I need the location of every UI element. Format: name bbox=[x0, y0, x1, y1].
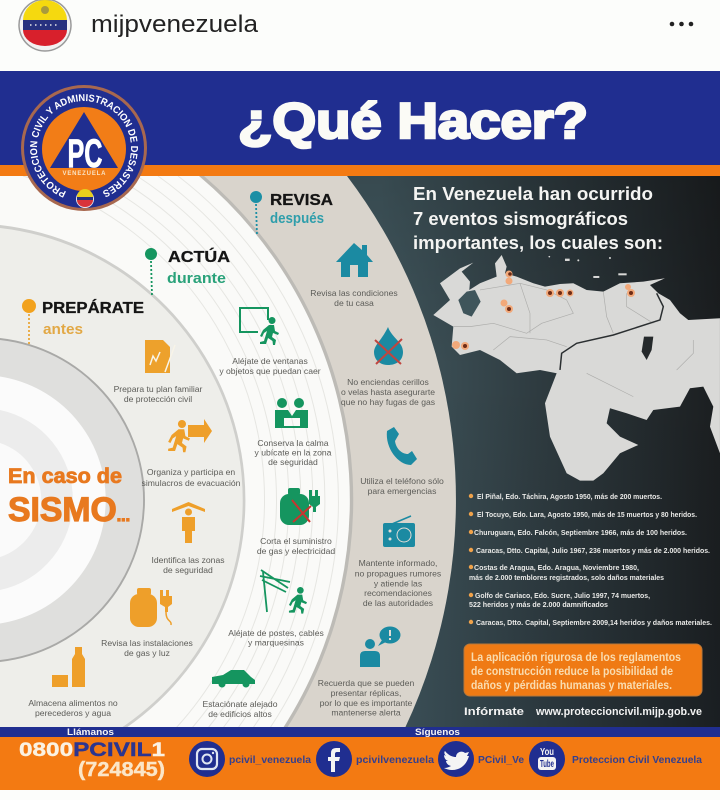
callout: building regulations bbox=[464, 644, 702, 696]
heading: actúa durante: ACTÚA bbox=[168, 247, 230, 266]
text: almacena alimentos: perecederos y agua bbox=[35, 708, 111, 718]
heading: prepárate antes: PREPÁRATE bbox=[42, 298, 144, 317]
guri lake bbox=[642, 337, 653, 360]
account name: mijpvenezuela bbox=[91, 11, 259, 38]
text: prepara plan: Prepara tu plan familiar bbox=[114, 384, 203, 394]
callout: building regulations: La aplicación rigurosa de los reglamentos bbox=[471, 652, 681, 664]
list: seismic events: 522 heridos y más de 2.000 damnificados bbox=[469, 600, 608, 609]
list: seismic events bbox=[469, 492, 712, 627]
icon: protección civil logo: VENEZUELA bbox=[62, 171, 106, 177]
text: instalaciones: Revisa las instalaciones bbox=[101, 638, 193, 648]
icon: facebook bbox=[316, 741, 352, 777]
islands bbox=[548, 256, 627, 278]
text: recuerda réplicas: Recuerda que se pueden bbox=[318, 678, 414, 688]
text: aléjate ventanas: Aléjate de ventanas bbox=[232, 356, 308, 366]
icon: youtube: You bbox=[540, 747, 554, 758]
center heading: en caso de sismo: En caso de bbox=[8, 465, 122, 488]
list: seismic events: El Tocuyo, Edo. Lara, Agosto 1950, más de 15 muertos y 80 heridos. bbox=[477, 510, 697, 519]
list: seismic events: Costas de Aragua, Edo. Aragua, Noviembre 1980, bbox=[474, 563, 639, 572]
icon: window and runner bbox=[239, 307, 279, 345]
text: no enciendas: o velas hasta asegurarte bbox=[341, 387, 435, 397]
text: conserva calma: y ubícate en la zona bbox=[255, 448, 332, 458]
text: postes cables: Aléjate de postes, cables bbox=[228, 628, 324, 638]
icon: pole and runner bbox=[260, 570, 307, 614]
text: mantente informado: Mantente informado, bbox=[359, 558, 437, 568]
panel: main body background bbox=[0, 176, 720, 728]
icon: gas tank and plug bbox=[130, 588, 172, 627]
text: mantente informado: de las autoridades bbox=[363, 598, 433, 608]
map heading: En Venezuela han ocurrido bbox=[413, 184, 653, 204]
list: seismic events: Churuguara, Edo. Falcón, Septiembre 1966, más de 100 heridos. bbox=[474, 528, 687, 537]
center heading: en caso de sismo bbox=[8, 465, 130, 529]
callout: building regulations: daños y pérdidas humanas y materiales. bbox=[471, 680, 672, 692]
icon: house bbox=[336, 243, 373, 277]
icon: twitter bbox=[438, 741, 474, 777]
icon: evacuation runner bbox=[168, 419, 212, 452]
icon: plan document bbox=[145, 340, 175, 373]
facebook handle: pcivilvenezuela bbox=[356, 754, 434, 766]
icon: profile avatar flag bbox=[19, 0, 71, 51]
map heading: importantes, los cuales son: bbox=[413, 233, 663, 253]
heading: actúa durante bbox=[145, 247, 230, 296]
heading: prepárate antes: antes bbox=[43, 321, 83, 338]
text: recuerda réplicas: presentar réplicas, bbox=[331, 688, 401, 698]
footer labels: Síguenos bbox=[415, 727, 460, 737]
text: mantente informado: recomendaciones bbox=[364, 588, 432, 598]
phone number bbox=[19, 740, 166, 781]
text: revisa condiciones: Revisa las condiciones bbox=[310, 288, 398, 298]
icon: instagram bbox=[189, 741, 225, 777]
header band bbox=[0, 71, 720, 176]
heading: prepárate antes bbox=[22, 298, 144, 346]
title: ¿Qué Hacer? bbox=[238, 93, 588, 149]
text: prepara plan: de protección civil bbox=[124, 394, 192, 404]
icon: youtube bbox=[529, 741, 565, 777]
map earthquake markers bbox=[452, 270, 635, 350]
text: conserva calma: de seguridad bbox=[268, 457, 318, 467]
text: estaciónate: de edificios altos bbox=[208, 709, 272, 719]
list: seismic events: Caracas, Dtto. Capital, Julio 1967, 236 muertos y más de 2.000 heridos. bbox=[476, 546, 710, 555]
icon: food and water bbox=[52, 647, 85, 687]
icon: gas cut bbox=[280, 488, 320, 525]
footer labels bbox=[67, 727, 460, 737]
icon: more menu bbox=[670, 22, 693, 26]
youtube channel: Proteccion Civil Venezuela bbox=[572, 754, 702, 766]
text: estaciónate: Estaciónate alejado bbox=[202, 699, 278, 709]
list: seismic events: Golfo de Cariaco, Edo. Sucre, Julio 1997, 74 muertos, bbox=[475, 591, 650, 600]
text: instalaciones: de gas y luz bbox=[124, 648, 170, 658]
text: simulacros: Organiza y participa en bbox=[147, 467, 235, 477]
list: seismic events: más de 2.000 temblores registrados, solo daños materiales bbox=[469, 573, 664, 582]
text: aléjate ventanas: y objetos que puedan caer bbox=[219, 366, 321, 376]
icon: radio bbox=[383, 516, 415, 547]
icon: car bbox=[212, 670, 255, 688]
panel: concentric arcs bbox=[0, 176, 456, 728]
text: revisa condiciones: de tu casa bbox=[334, 298, 374, 308]
footer bbox=[0, 727, 720, 790]
text: recuerda réplicas: mantenerse alerta bbox=[331, 708, 401, 718]
lake maracaibo bbox=[458, 290, 481, 317]
heading: revisa después: después bbox=[270, 210, 324, 227]
text: zonas de seguridad: de seguridad bbox=[163, 565, 213, 575]
center heading: en caso de sismo: SISMO... bbox=[8, 491, 130, 529]
map of venezuela bbox=[433, 255, 720, 481]
website line: Infórmate bbox=[464, 706, 524, 718]
icon: youtube: Tube bbox=[540, 759, 554, 770]
list: seismic events: El Piñal, Edo. Táchira, Agosto 1950, más de 200 muertos. bbox=[477, 492, 662, 501]
website line bbox=[464, 706, 702, 718]
icon: person with alert bubble bbox=[360, 626, 400, 667]
profile header bbox=[19, 0, 693, 51]
icon: phone bbox=[387, 427, 417, 465]
footer labels: Llámanos bbox=[67, 727, 114, 737]
instagram handle: pcivil_venezuela bbox=[229, 754, 311, 766]
text: recuerda réplicas: por lo que es importante bbox=[320, 698, 413, 708]
text: simulacros: simulacros de evacuación bbox=[142, 478, 241, 488]
column: actúa items bbox=[202, 307, 335, 719]
website line: www.proteccioncivil.mijp.gob.ve bbox=[535, 706, 702, 718]
heading: revisa después: REVISA bbox=[270, 192, 333, 209]
map heading: 7 eventos sismográficos bbox=[413, 209, 628, 229]
orinoco river bbox=[560, 293, 663, 370]
text: almacena alimentos: Almacena alimentos no bbox=[28, 698, 118, 708]
phone number: (724845) bbox=[78, 759, 165, 781]
text: mantente informado: y atiende las bbox=[374, 578, 422, 588]
column: revisa items bbox=[310, 243, 444, 718]
text: zonas de seguridad: Identifica las zonas bbox=[151, 555, 225, 565]
heading: revisa después bbox=[250, 191, 333, 236]
text: conserva calma: Conserva la calma bbox=[257, 438, 329, 448]
text: corta suministro: Corta el suministro bbox=[260, 536, 332, 546]
column: prepárate items bbox=[28, 340, 241, 718]
callout: building regulations: de construcción reduce la posibilidad de bbox=[471, 666, 673, 678]
icon: safe zone person bbox=[172, 502, 205, 543]
heading: actúa durante: durante bbox=[167, 270, 226, 287]
text: mantente informado: no propagues rumores bbox=[355, 568, 441, 578]
text: postes cables: y marquesinas bbox=[248, 638, 304, 648]
twitter handle: PCivil_Ve bbox=[478, 754, 524, 766]
list: seismic events: Caracas, Dtto. Capital, Septiembre 2009,14 heridos y daños materiales. bbox=[476, 618, 712, 627]
text: no enciendas: que no hay fugas de gas bbox=[341, 397, 435, 407]
text: corta suministro: de gas y electricidad bbox=[257, 546, 335, 556]
icon: protección civil logo: PROTECCION CIVIL Y ADMINISTRACION DE DESASTRES bbox=[30, 94, 138, 198]
icon: two people bbox=[275, 398, 308, 428]
text: no enciendas: No enciendas cerillos bbox=[347, 377, 429, 387]
text: utiliza teléfono: para emergencias bbox=[368, 486, 436, 496]
phone number: 0800 PCIVIL 1 bbox=[19, 740, 166, 761]
icon: protección civil logo: PC bbox=[68, 132, 102, 176]
text: utiliza teléfono: Utiliza el teléfono sólo bbox=[360, 476, 444, 486]
icon: flame crossed bbox=[374, 327, 403, 365]
